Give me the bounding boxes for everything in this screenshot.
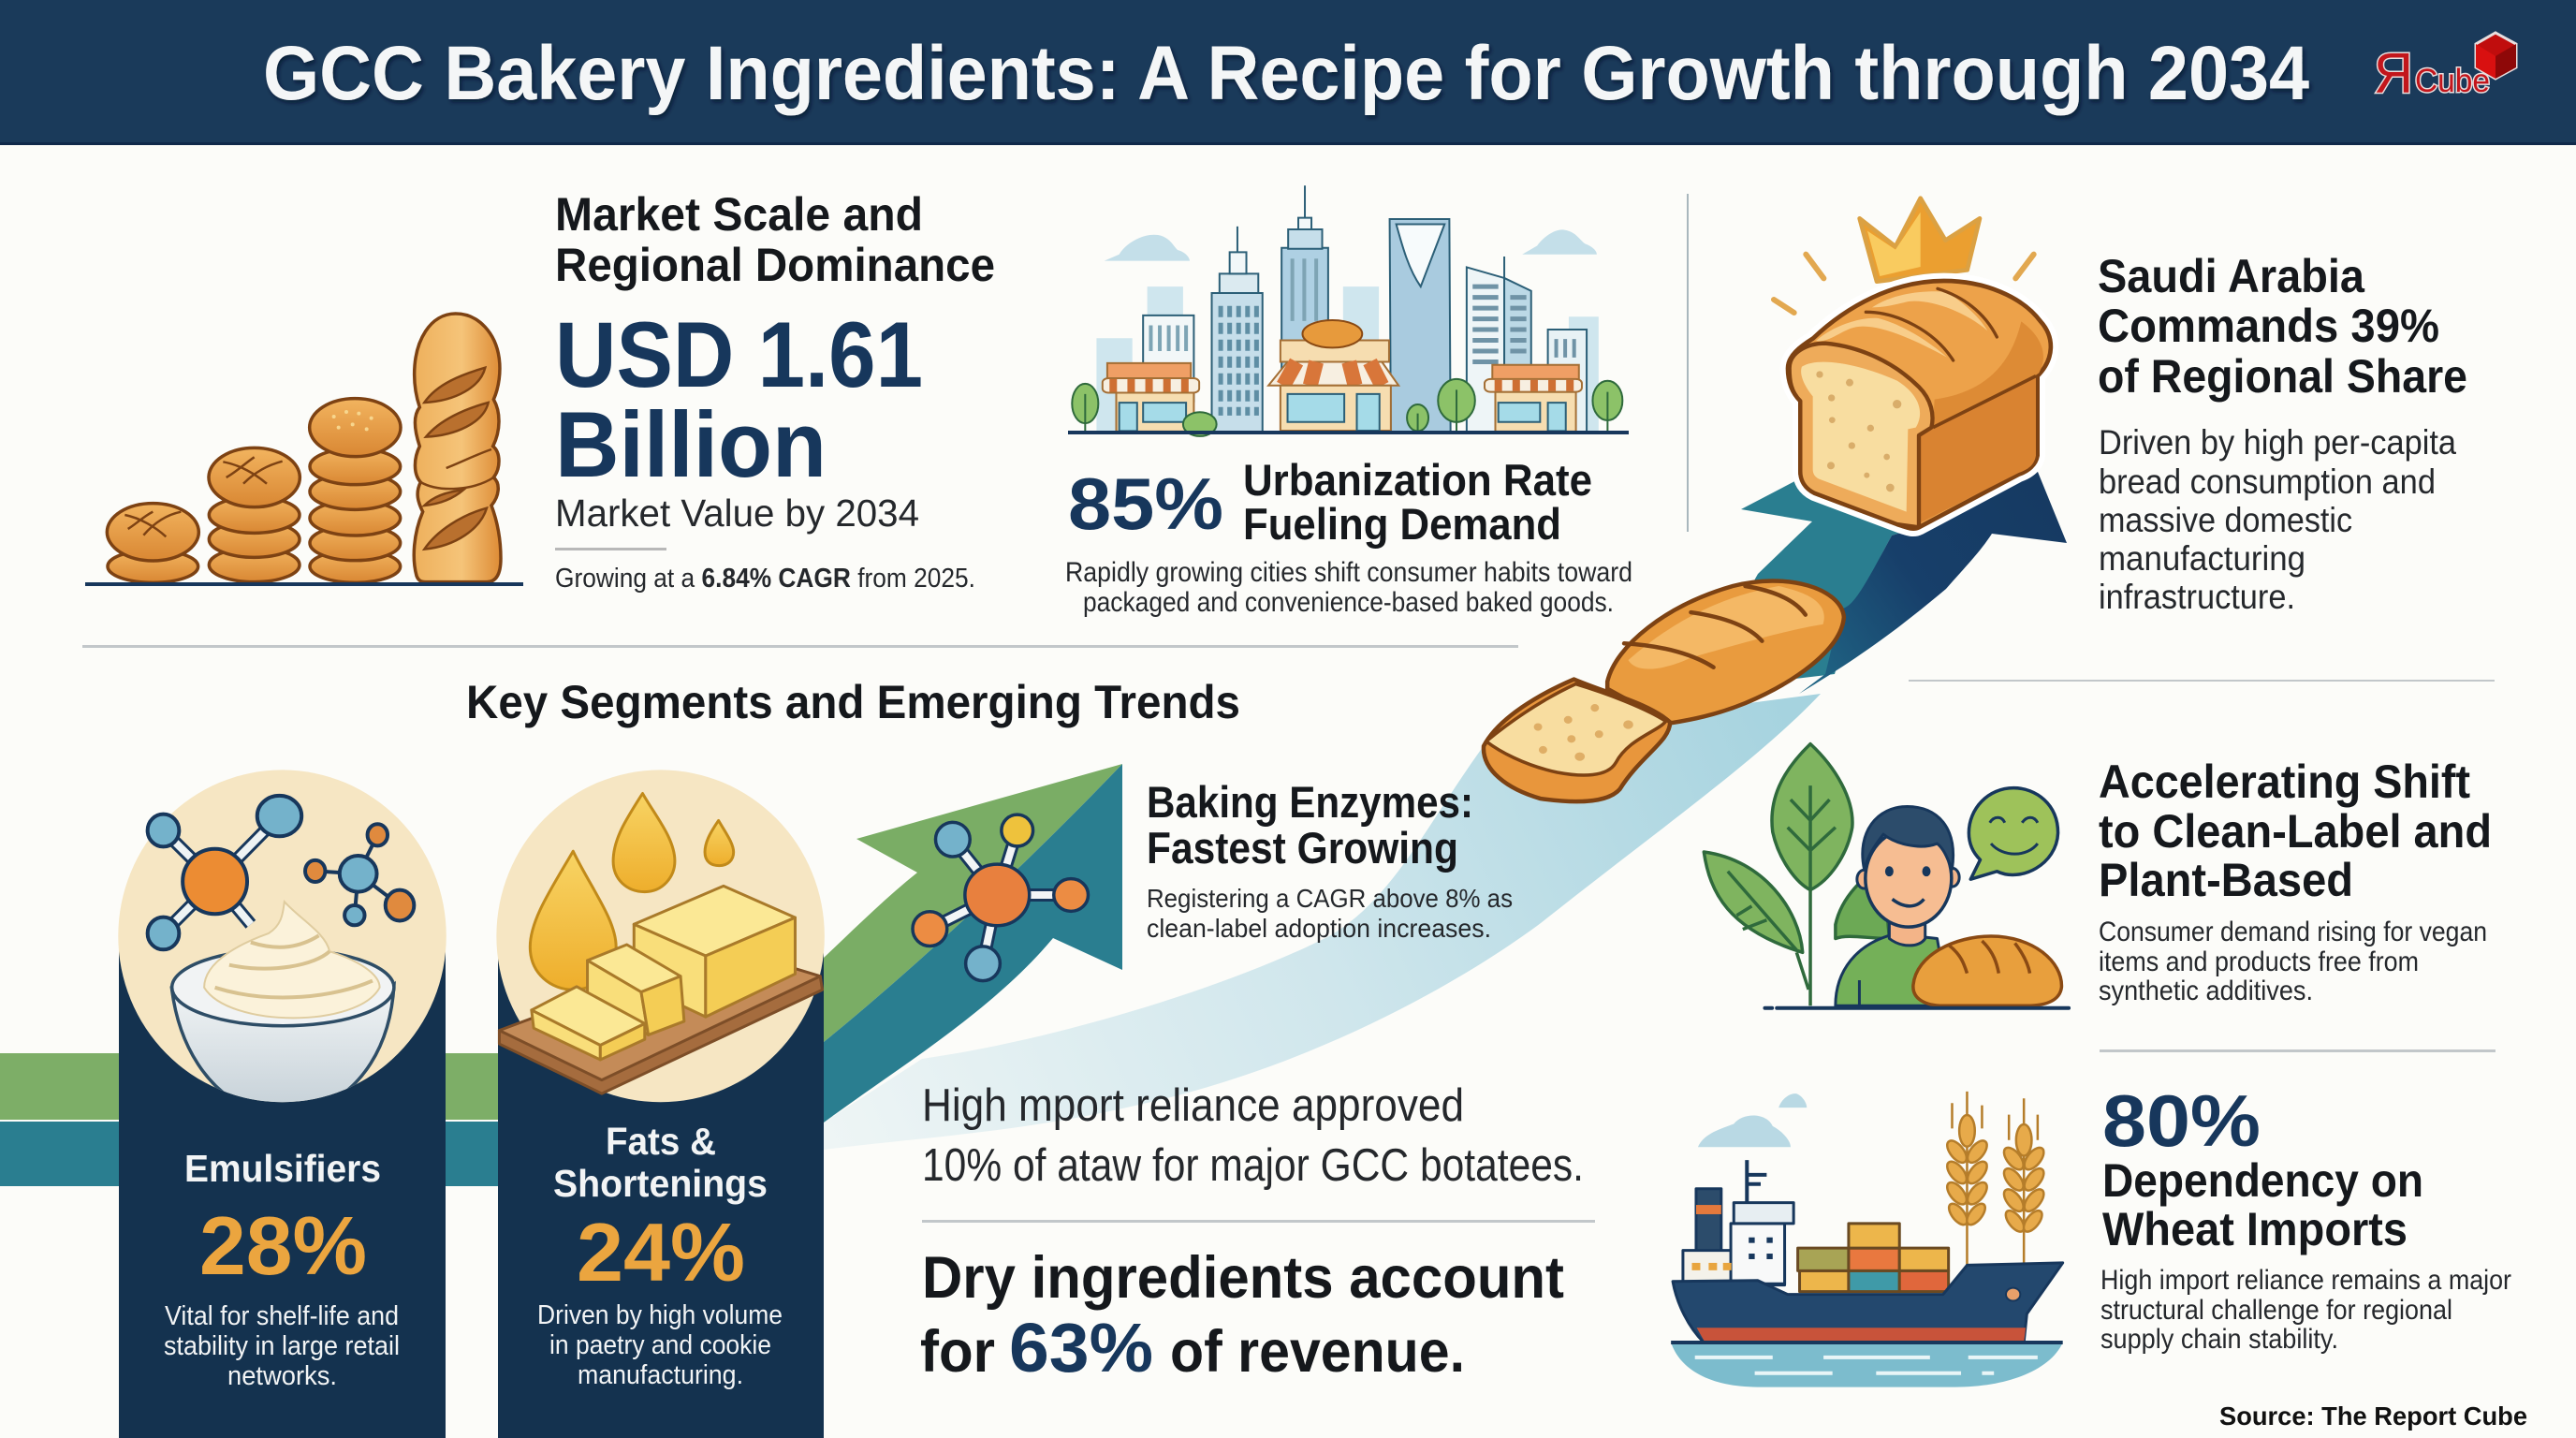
body: wheat imports <box>2100 1265 2511 1355</box>
text block: wheat imports <box>2100 1079 2511 1355</box>
body: clean label: Consumer demand rising for vegan <box>2099 917 2487 947</box>
hull <box>1673 1263 2063 1343</box>
toast slice <box>1484 680 1670 801</box>
body: enzymes <box>1147 884 1513 943</box>
stat: 24%: 24% <box>577 1206 745 1299</box>
superstructure <box>1683 1160 1793 1285</box>
heading: market scale: Regional Dominance <box>555 239 995 291</box>
water <box>1671 1343 2063 1387</box>
heading: enzymes: Fastest Growing <box>1147 823 1458 873</box>
ribbon: growth swoosh with bread arrow <box>824 472 2067 1150</box>
body: Saudi share: manufacturing <box>2099 539 2305 578</box>
heading: Saudi share <box>2098 250 2467 403</box>
CAGR line: Growing at a 6.84% CAGR from 2025. <box>555 564 975 594</box>
body: clean label <box>2099 917 2487 1006</box>
heading: Saudi share: of Regional Share <box>2098 350 2467 403</box>
label: Emulsifiers: Emulsifiers <box>184 1147 381 1190</box>
ground line under breads <box>85 582 523 586</box>
body: emulsifiers: networks. <box>227 1361 337 1391</box>
body: clean label: synthetic additives. <box>2099 976 2313 1006</box>
containers <box>1798 1224 1949 1292</box>
heading: enzymes <box>1147 777 1473 873</box>
trees <box>1072 379 1622 436</box>
text block: Saudi Arabia <box>2098 250 2467 616</box>
value: USD 1.61 Billion: USD 1.61 <box>555 302 923 406</box>
panel: fats and shortenings <box>496 770 825 1438</box>
section rules <box>82 194 2496 1223</box>
text block: dry ingredients: 63% <box>1009 1309 1153 1387</box>
icon: emulsifier bowl and molecules <box>118 770 446 1109</box>
band: green and teal stripes <box>0 1053 505 1186</box>
body: wheat imports: structural challenge for regional <box>2100 1295 2452 1326</box>
value: USD 1.61 Billion: Billion <box>555 392 827 496</box>
source note: Source: The Report Cube <box>2219 1401 2527 1431</box>
icon: butter and oil drops <box>496 770 825 1102</box>
heading: enzymes: Baking Enzymes: <box>1147 777 1473 827</box>
body: fats: Driven by high volume <box>537 1300 783 1330</box>
heading: wheat imports <box>2102 1154 2423 1255</box>
heading: market scale: Market Scale and <box>555 188 923 241</box>
value: USD 1.61 Billion <box>555 302 923 496</box>
body: fats <box>537 1300 783 1390</box>
body: urbanization: packaged and convenience-based baked goods. <box>1083 587 1614 618</box>
icon: cargo ship with wheat <box>1671 1092 2063 1387</box>
heading: urbanization <box>1243 455 1592 549</box>
heading: Saudi share: Saudi Arabia <box>2098 250 2365 302</box>
label: Fats and Shortenings <box>553 1120 768 1205</box>
body: Saudi share: Driven by high per-capita <box>2099 423 2456 462</box>
heading: wheat imports: Dependency on <box>2102 1154 2423 1207</box>
icon: long bread and toast slice <box>1484 580 1844 801</box>
logo: RCube: Cube <box>2415 63 2490 99</box>
label: Fats and Shortenings: Shortenings <box>553 1162 768 1205</box>
icon: big bread loaf <box>1788 281 2051 529</box>
text block: import note: 10% of ataw for major GCC botatees. <box>922 1140 1584 1191</box>
panel: emulsifiers <box>118 770 446 1438</box>
text block: clean label <box>2099 756 2492 1006</box>
body: fats: manufacturing. <box>578 1360 743 1390</box>
heading: urbanization: Urbanization Rate <box>1243 455 1592 505</box>
body: emulsifiers: stability in large retail <box>164 1331 400 1361</box>
illustration: city skyline with bakeries <box>1072 185 1622 436</box>
heading: clean label: to Clean-Label and <box>2099 805 2492 858</box>
text block: urbanization <box>1065 455 1632 618</box>
heading: urbanization: Fueling Demand <box>1243 499 1561 549</box>
icon: enzyme molecule <box>913 814 1088 981</box>
heading: wheat imports: Wheat Imports <box>2102 1203 2408 1255</box>
header band <box>0 0 2576 145</box>
illustration: stacked buns and baguette <box>107 314 501 582</box>
text block: dry ingredients <box>920 1245 1564 1387</box>
title: GCC Bakery Ingredients: A Recipe for Growth through 2034 <box>263 31 2309 116</box>
heading: Saudi share: Commands 39% <box>2098 300 2439 352</box>
body: emulsifiers: Vital for shelf-life and <box>165 1301 399 1331</box>
body: fats: in paetry and cookie <box>549 1330 771 1360</box>
stat: 85%: 85% <box>1068 462 1223 545</box>
text block: import note <box>922 1080 1584 1191</box>
body: wheat imports: supply chain stability. <box>2100 1324 2338 1355</box>
heading: key segments: Key Segments and Emerging Trends <box>466 676 1240 728</box>
left shop <box>1116 389 1193 432</box>
stat: 28%: 28% <box>199 1199 367 1292</box>
label: Fats and Shortenings: Fats & <box>606 1120 716 1163</box>
stat: 80%: 80% <box>2102 1079 2261 1162</box>
arrow: green and teal growth arrow <box>824 764 1122 1123</box>
text block: market scale <box>555 188 995 594</box>
body: Saudi share: massive domestic <box>2099 501 2352 539</box>
body: Saudi share: bread consumption and <box>2099 462 2436 501</box>
heading: clean label: Accelerating Shift <box>2099 756 2470 808</box>
heading: market scale <box>555 188 995 291</box>
body: enzymes: clean-label adoption increases. <box>1147 914 1491 943</box>
text block: dry ingredients: of revenue. <box>1170 1319 1465 1385</box>
icon: crown with rays <box>1774 198 2034 313</box>
text block: import note: High mport reliance approved <box>922 1080 1464 1131</box>
market value label: Market Value by 2034 <box>555 492 919 535</box>
heading: clean label <box>2099 756 2492 906</box>
text block: baking enzymes <box>1147 777 1513 943</box>
body: wheat imports: High import reliance remains a major <box>2100 1265 2511 1296</box>
logo: RCube: Я <box>2374 42 2413 105</box>
long bread <box>1607 580 1844 723</box>
text block: dry ingredients: Dry ingredients account <box>922 1245 1564 1311</box>
logo: RCube <box>2374 33 2516 105</box>
body: enzymes: Registering a CAGR above 8% as <box>1147 884 1513 913</box>
body: Saudi share: infrastructure. <box>2099 578 2295 616</box>
body: urbanization <box>1065 557 1632 618</box>
heading: clean label: Plant-Based <box>2099 854 2353 906</box>
wheat stalks <box>1943 1092 2048 1265</box>
right shop <box>1495 392 1576 432</box>
body: urbanization: Rapidly growing cities shift consumer habits toward <box>1065 557 1632 588</box>
text block: dry ingredients: for <box>920 1319 995 1385</box>
body: clean label: items and products free from <box>2099 946 2419 977</box>
center shop <box>1281 341 1389 361</box>
icon: person with plant and bread <box>1704 744 2069 1008</box>
body: Saudi share <box>2099 423 2456 616</box>
body: emulsifiers <box>164 1301 400 1391</box>
ground line under city <box>1068 431 1629 434</box>
